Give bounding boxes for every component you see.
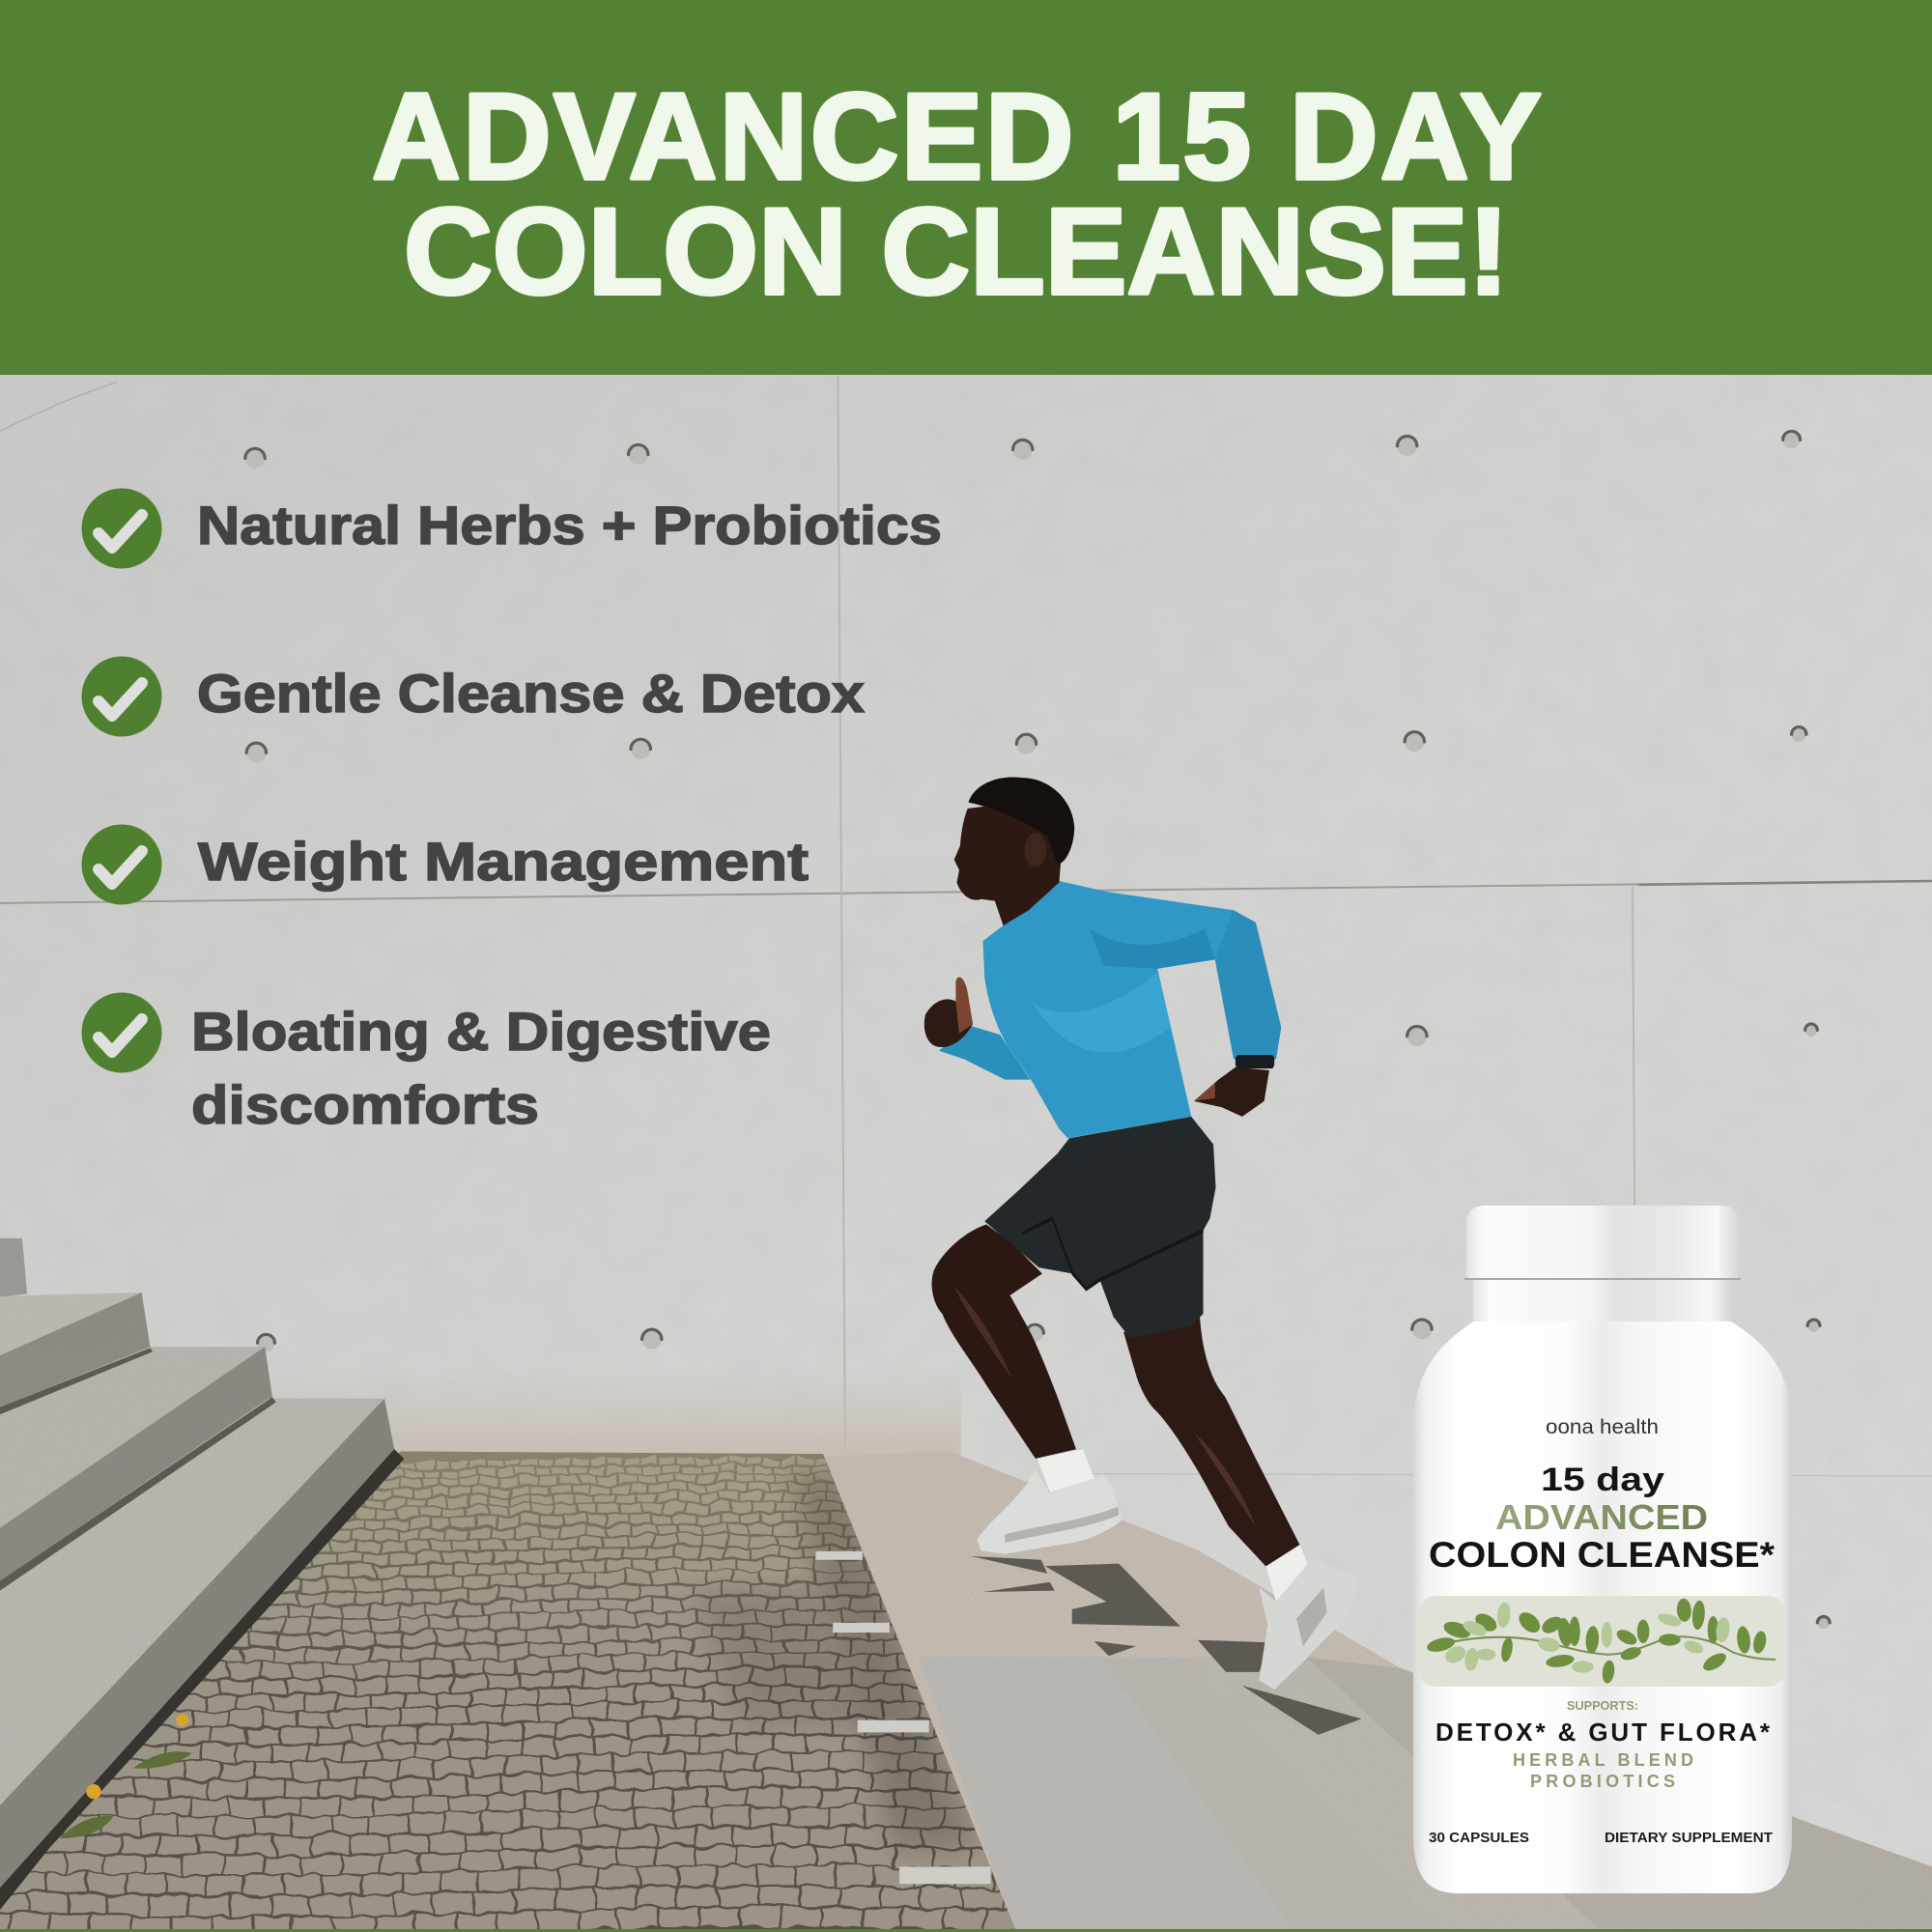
front sock	[1037, 1449, 1100, 1498]
leaf branch	[1427, 1595, 1776, 1686]
brand: oona health	[1546, 1416, 1659, 1438]
watch	[1236, 1055, 1274, 1068]
left hand	[924, 978, 973, 1047]
shirt	[983, 879, 1281, 1138]
shorts fold	[1022, 1218, 1204, 1289]
ear	[1025, 833, 1046, 867]
front shoe	[978, 1471, 1122, 1554]
ground walkway	[823, 1452, 1932, 1932]
product line advanced: ADVANCED	[1495, 1497, 1708, 1537]
back leg highlight	[1195, 1434, 1256, 1526]
shorts	[984, 1117, 1216, 1338]
back shoe panel	[1296, 1588, 1327, 1646]
back sock	[1265, 1545, 1310, 1602]
dietary supplement: DIETARY SUPPLEMENT	[1605, 1830, 1773, 1846]
benefit: bloating	[81, 993, 771, 1135]
benefit text line one: Bloating & Digestive	[191, 1001, 771, 1062]
capsule count: 30 CAPSULES	[1429, 1830, 1529, 1846]
cobblestone path	[0, 1441, 1047, 1932]
runner figure	[924, 777, 1359, 1690]
product bottle	[1413, 1206, 1792, 1893]
header band	[0, 0, 1932, 375]
front shoe stripe	[1005, 1511, 1119, 1539]
runner shadows on ground	[971, 1556, 1361, 1735]
bottle cap	[1466, 1206, 1739, 1280]
benefit text: Gentle Cleanse & Detox	[197, 663, 865, 724]
back shoe	[1259, 1557, 1359, 1690]
back leg	[1123, 1317, 1300, 1566]
check icon	[81, 825, 162, 904]
benefit: natural herbs	[81, 489, 942, 568]
left thumb	[955, 978, 973, 1034]
check icon	[81, 489, 162, 568]
check icon	[81, 993, 162, 1072]
supports label: SUPPORTS:	[1567, 1698, 1638, 1713]
stone staircase	[0, 1238, 407, 1910]
leaf banner	[1418, 1596, 1785, 1687]
cap seam	[1464, 1278, 1741, 1280]
probiotics: PROBIOTICS	[1530, 1772, 1675, 1791]
pale paver blocks	[815, 1551, 991, 1884]
right hand	[1194, 1067, 1269, 1117]
bottle body	[1413, 1321, 1792, 1893]
title line two: COLON CLEANSE!	[404, 183, 1509, 320]
bottle neck	[1473, 1280, 1731, 1338]
benefit text line two: discomforts	[191, 1074, 539, 1135]
shirt shadow	[1090, 928, 1215, 969]
benefit text: Natural Herbs + Probiotics	[197, 495, 942, 555]
dandelion weeds	[59, 1714, 192, 1838]
forearm sleeve	[939, 1026, 1031, 1080]
product line colon cleanse: COLON CLEANSE*	[1429, 1535, 1776, 1575]
sleeve cuff	[1215, 910, 1281, 1060]
shirt shading	[1032, 972, 1171, 1053]
product line 15 day: 15 day	[1541, 1462, 1664, 1498]
detox and gut flora: DETOX* & GUT FLORA*	[1435, 1718, 1771, 1747]
benefit text: Weight Management	[198, 831, 809, 892]
herbal blend: HERBAL BLEND	[1513, 1750, 1693, 1770]
front thigh highlight	[954, 1286, 1011, 1378]
benefit: gentle cleanse	[81, 657, 865, 736]
benefit: weight management	[81, 825, 809, 904]
thumb pointing	[1194, 1083, 1215, 1101]
check icon	[81, 657, 162, 736]
neck and face	[954, 799, 1072, 925]
front leg	[932, 1224, 1076, 1459]
bottom green strip	[0, 1929, 1932, 1932]
hair	[968, 777, 1074, 864]
title line one: ADVANCED 15 DAY	[372, 68, 1542, 205]
